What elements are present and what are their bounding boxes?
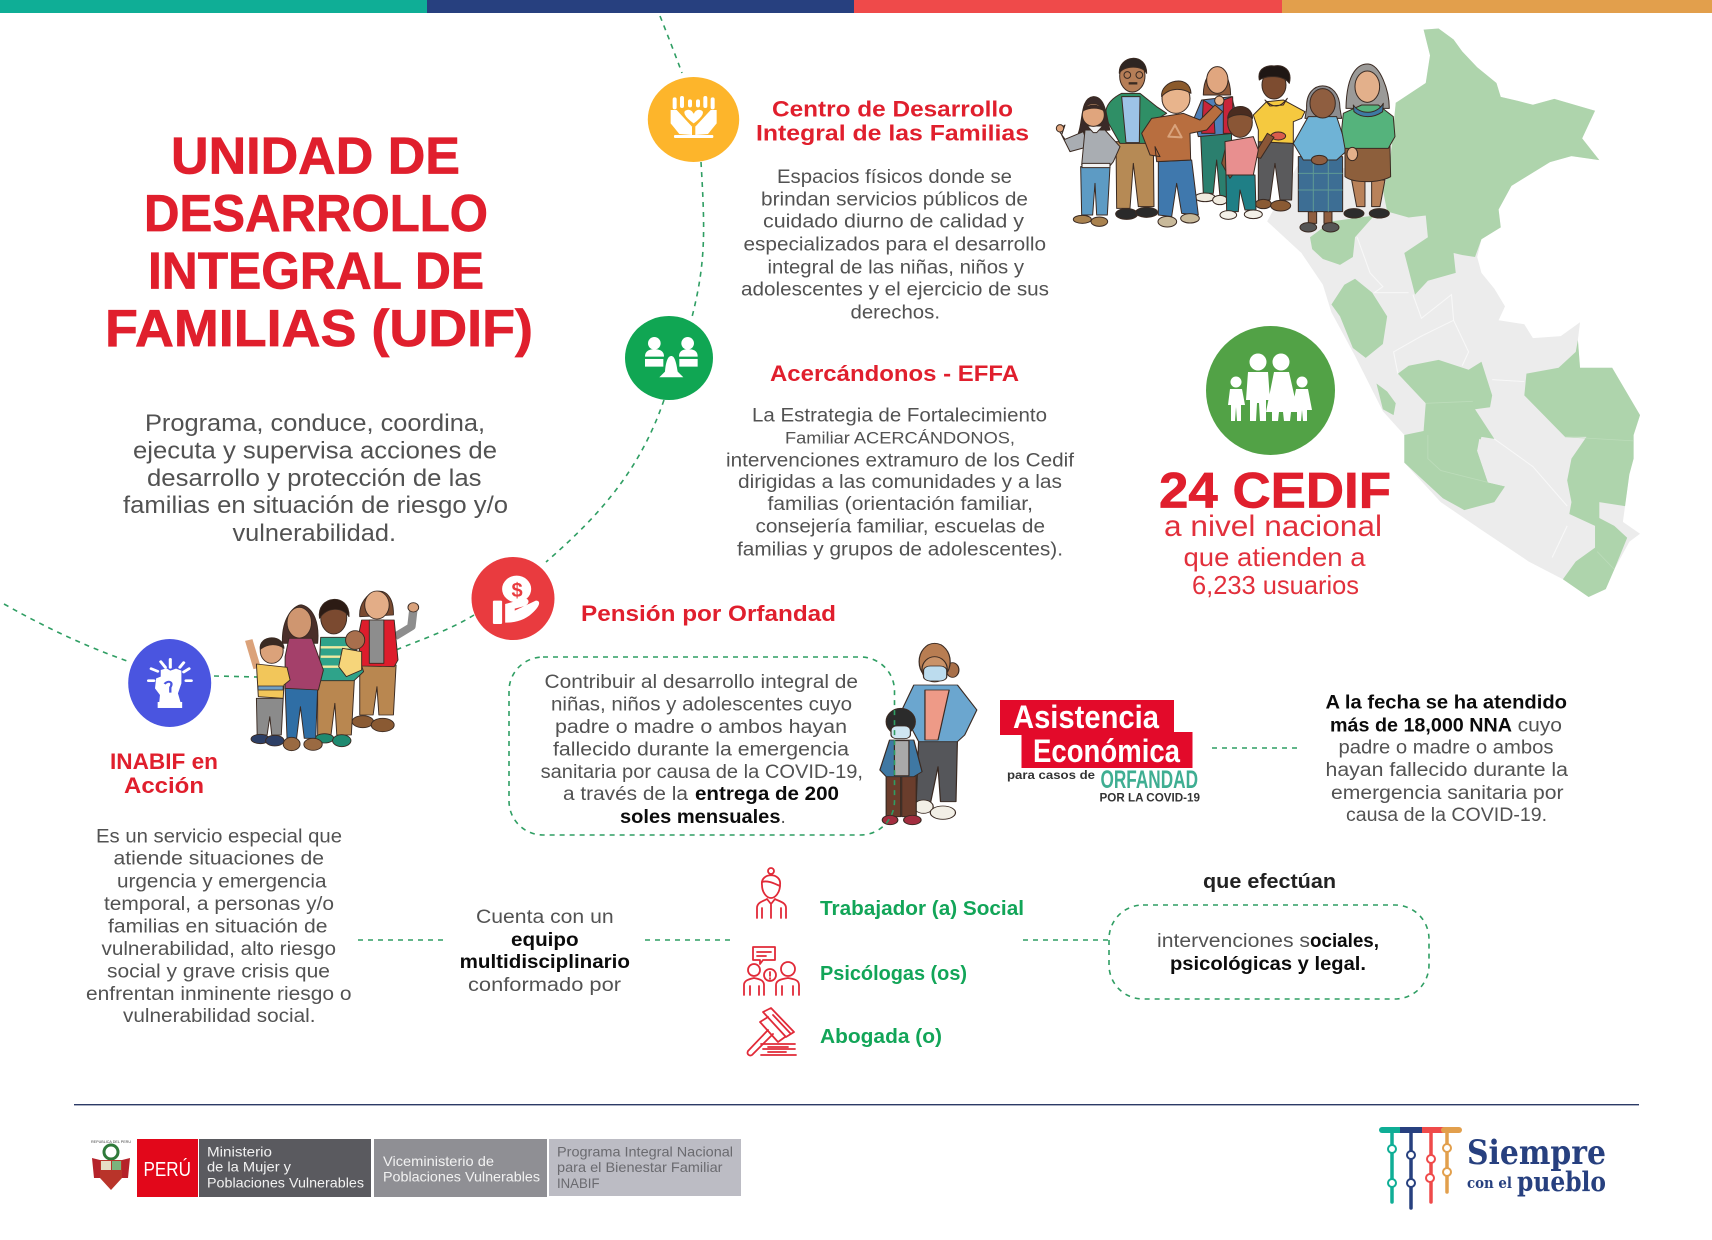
text: INABIF description: Es un servicio especial que <box>96 826 342 848</box>
intro paragraph <box>123 410 508 547</box>
text: children attended: padre o madre o ambos <box>1338 738 1554 758</box>
title <box>105 128 533 358</box>
text: INABIF description: familias en situación de <box>108 916 328 938</box>
text: Centro description <box>741 167 1049 324</box>
person: man with glasses <box>1106 58 1167 219</box>
callout: pension description: Contribuir al desarrollo integral de <box>544 672 858 693</box>
callout: interventions: ociales, <box>1310 931 1379 952</box>
person: woman in red vest <box>352 591 419 732</box>
text: Centro description: adolescentes y el ejercicio de sus <box>741 280 1049 300</box>
text: Acercándonos description: intervenciones extramuro de los Cedif <box>726 450 1075 472</box>
callout: pension description: sanitaria por causa de la COVID-19, <box>541 762 863 783</box>
icon: red circle with coin in hand: $ <box>511 580 523 602</box>
callout: pension description: soles mensuales <box>620 807 780 828</box>
logo: Asistencia Economica: para casos de <box>1007 768 1095 782</box>
logo: coat of arms <box>91 1139 131 1190</box>
illustration: mother and child with masks <box>880 643 977 825</box>
text: multidisciplinary team: equipo <box>511 930 579 951</box>
heading: Centro de Desarrollo: Integral de las Familias <box>756 120 1029 146</box>
text: children attended: causa de la COVID-19. <box>1346 805 1547 826</box>
logo: Siempre con el pueblo: pueblo <box>1517 1167 1606 1198</box>
text: Centro description: derechos. <box>850 302 940 324</box>
text: Centro description: especializados para el desarrollo <box>744 234 1046 256</box>
logo: Ministerio block: Poblaciones Vulnerables <box>207 1175 364 1191</box>
icon: psychologists <box>744 947 799 995</box>
heading: INABIF en Accion <box>110 749 218 798</box>
stat: 24 CEDIF: 6,233 usuarios <box>1192 570 1359 600</box>
logo: Asistencia Economica <box>1000 699 1200 805</box>
icon: red circle with coin in hand <box>472 557 554 640</box>
stat: 24 CEDIF: 24 CEDIF <box>1159 462 1391 518</box>
icon: blue circle with fist <box>128 639 211 727</box>
text: Acercándonos description: Familiar ACERCÁNDONOS, <box>785 428 1015 448</box>
heading: Centro de Desarrollo <box>756 96 1029 146</box>
text: Centro description: cuidado diurno de calidad y <box>763 212 1025 232</box>
callout: pension description: niñas, niños y adolescentes cuyo <box>551 695 852 716</box>
logo: Ministerio block: Viceministerio de <box>383 1153 494 1169</box>
dashed connector curve <box>4 16 704 677</box>
text: Acercándonos description: dirigidas a las comunidades y a las <box>738 472 1062 493</box>
person: kid in pink shirt <box>1220 106 1274 219</box>
text: children attended: emergencia sanitaria por <box>1331 783 1564 804</box>
callout: pension description: . <box>780 807 786 828</box>
logo: Asistencia Economica: Económica <box>1033 733 1180 769</box>
person: child <box>880 708 922 825</box>
text: INABIF description: atiende situaciones de <box>114 848 324 870</box>
heading: Pensión por Orfandad: Pensión por Orfandad <box>581 601 836 626</box>
label: Trabajador Social: Trabajador (a) Social <box>820 898 1024 920</box>
text: INABIF description: vulnerabilidad social. <box>123 1006 316 1027</box>
top colour bar <box>0 0 1712 13</box>
logo: Ministerio block <box>137 1139 741 1197</box>
logo: Siempre con el pueblo <box>1379 1127 1606 1208</box>
text: Acercándonos description: consejería familiar, escuelas de <box>756 516 1045 538</box>
text: multidisciplinary team <box>460 907 630 996</box>
person: young man in yellow shirt <box>1253 66 1305 211</box>
intro paragraph: desarrollo y protección de las <box>147 465 482 492</box>
text: multidisciplinary team: Cuenta con un <box>476 907 614 928</box>
logo: Siempre con el pueblo: con el <box>1467 1174 1512 1192</box>
intro paragraph: familias en situación de riesgo y/o <box>123 492 508 519</box>
intro paragraph: vulnerabilidad. <box>232 520 396 547</box>
logo: Ministerio block: INABIF <box>557 1175 600 1191</box>
text: INABIF description <box>86 826 352 1027</box>
illustration: family waving <box>249 591 419 751</box>
callout: pension description: entrega de 200 <box>695 784 839 805</box>
logo: Ministerio block: PERÚ <box>144 1158 191 1181</box>
icon: yellow circle with hands and heart <box>648 77 739 162</box>
text: Centro description: brindan servicios públicos de <box>761 190 1028 210</box>
person: girl <box>1056 97 1120 226</box>
icon: green circle with people <box>625 316 713 400</box>
icon: gavel and books <box>748 1008 796 1055</box>
heading: INABIF en Accion: Acción <box>124 773 204 798</box>
icon: social worker <box>757 868 786 918</box>
intro paragraph: Programa, conduce, coordina, <box>145 410 485 437</box>
label: Psicologas: Psicólogas (os) <box>820 963 967 985</box>
person: woman in magenta sweater <box>282 605 323 751</box>
callout: pension description <box>509 657 894 835</box>
logo: coat of arms: REPUBLICA DEL PERU <box>91 1139 131 1144</box>
stat: 24 CEDIF: que atienden a <box>1184 542 1366 572</box>
logo: Asistencia Economica: POR LA COVID-19 <box>1100 793 1200 805</box>
text: multidisciplinary team: multidisciplinario <box>460 952 630 973</box>
text: INABIF description: temporal, a personas y/o <box>104 894 334 915</box>
text: Acercándonos description: familias (orientación familiar, <box>768 494 1033 515</box>
heading: Centro de Desarrollo: Centro de Desarrollo <box>772 96 1013 122</box>
callout: pension description: fallecido durante la emergencia <box>553 740 849 761</box>
text: INABIF description: urgencia y emergencia <box>117 872 327 892</box>
heading: INABIF en Accion: INABIF en <box>110 749 218 774</box>
text: children attended: más de 18,000 NNA <box>1330 716 1512 736</box>
text: Centro description: integral de las niñas, niños y <box>768 258 1025 278</box>
callout: interventions: intervenciones s <box>1157 931 1310 952</box>
title: DESARROLLO <box>144 185 488 243</box>
logo: Ministerio block: Ministerio <box>207 1144 272 1160</box>
callout: interventions: psicológicas y legal. <box>1170 954 1366 975</box>
person: boy in orange shirt <box>1142 81 1224 227</box>
text: INABIF description: social y grave crisis que <box>107 962 330 982</box>
logo: Siempre con el pueblo: Siempre <box>1467 1133 1606 1173</box>
person: older woman in blue jacket <box>1293 86 1348 232</box>
stat: 24 CEDIF <box>1159 462 1391 600</box>
text: children attended: cuyo <box>1518 716 1562 736</box>
title: FAMILIAS (UDIF) <box>105 300 533 358</box>
person: older woman in green sweater <box>1342 64 1395 218</box>
label: Abogada: Abogada (o) <box>820 1026 942 1048</box>
logo: Asistencia Economica: ORFANDAD <box>1100 766 1198 794</box>
text: Centro description: Espacios físicos donde se <box>777 167 1012 188</box>
map of Peru <box>1267 28 1640 597</box>
icon: families in green circle <box>1206 326 1335 455</box>
logo: Ministerio block: para el Bienestar Familiar <box>557 1159 723 1175</box>
text: children attended: hayan fallecido durante la <box>1326 760 1568 781</box>
text: INABIF description: vulnerabilidad, alto riesgo <box>102 939 336 960</box>
intro paragraph: ejecuta y supervisa acciones de <box>133 438 497 464</box>
person: mother <box>903 643 977 819</box>
footer divider <box>74 1104 1639 1105</box>
heading: Acercándonos - EFFA: Acercándonos - EFFA <box>770 361 1019 386</box>
text: Acercándonos description: familias y grupos de adolescentes). <box>737 540 1063 560</box>
title: UNIDAD DE <box>171 128 460 186</box>
illustration: group of people from the CEDIF <box>1056 58 1395 232</box>
title: INTEGRAL DE <box>148 242 484 300</box>
callout: pension description: a través de la <box>563 784 688 805</box>
heading: que efectuan: que efectúan <box>1203 871 1336 893</box>
stat: 24 CEDIF: a nivel nacional <box>1164 510 1382 543</box>
callout: pension description: padre o madre o ambos hayan <box>555 717 847 738</box>
callout: interventions <box>1109 905 1429 999</box>
logo: Asistencia Economica: Asistencia <box>1013 699 1159 735</box>
person: boy in yellow shirt <box>249 638 290 746</box>
logo: Ministerio block: Programa Integral Nacional <box>557 1144 733 1160</box>
text: children attended <box>1326 693 1568 826</box>
logo: Ministerio block: Poblaciones Vulnerables <box>383 1169 540 1185</box>
text: Acercándonos description <box>726 406 1075 560</box>
logo: Ministerio block: de la Mujer y <box>207 1159 291 1175</box>
text: multidisciplinary team: conformado por <box>468 975 622 996</box>
person: woman in red vest <box>1194 67 1237 205</box>
text: INABIF description: enfrentan inminente riesgo o <box>86 984 352 1005</box>
text: children attended: A la fecha se ha atendido <box>1326 693 1567 714</box>
person: man with baby <box>315 599 365 747</box>
text: Acercándonos description: La Estrategia de Fortalecimiento <box>752 406 1047 426</box>
